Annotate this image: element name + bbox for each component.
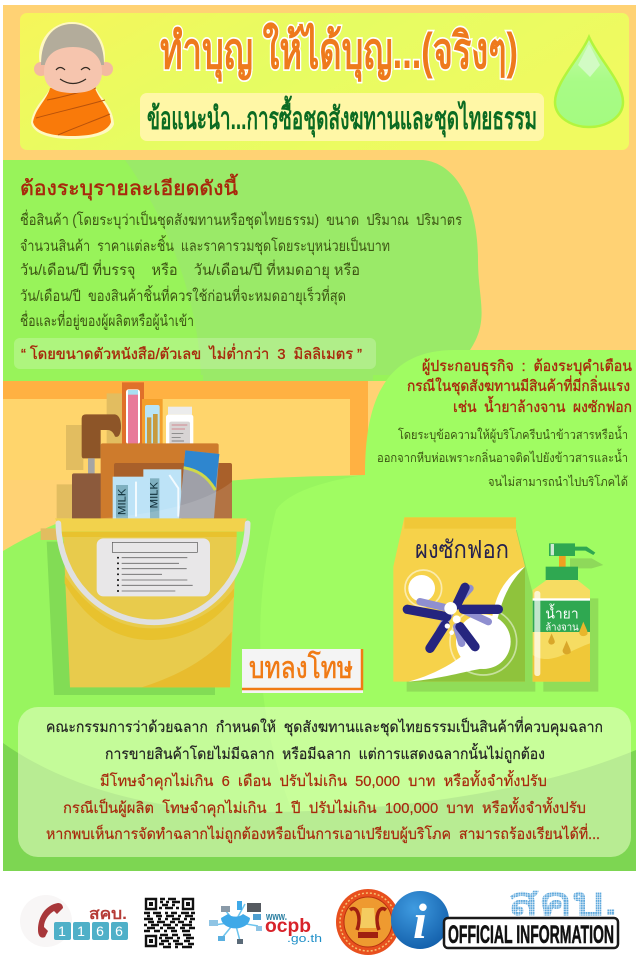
label: penalties: บทลงโทษ [249,650,353,685]
body text: วัน/เดือน/ปี ที่บรรจุ หรือ วัน/เดือน/ปี ที่หมดอายุ หรือ [20,259,360,280]
logo: hotline 1166: 6 [115,923,123,939]
icon: monk [31,22,114,139]
logo: official information: สคบ. [508,880,618,924]
icon: water drop [555,37,623,127]
icon: dish soap bottle [533,543,603,692]
warning text [377,425,628,489]
subtitle [140,93,544,141]
label: penalties [242,649,363,693]
logo: hotline 1166: 6 [96,923,104,939]
note pill: “ โดยขนาดตัวหนังสือ/ตัวเลข ไม่ต่ำกว่า 3 มิลลิเมตร ” [21,343,362,363]
warning text: จนไม่สามารถนำไปบริโภคได้ [488,474,628,489]
logo: ocpb website: ocpb [265,916,311,937]
body text: ชื่อและที่อยู่ของผู้ผลิตหรือผู้นำเข้า [20,310,194,330]
panel: required details [3,160,482,381]
body text: ชื่อสินค้า (โดยระบุว่าเป็นชุดสังฆทานหรือชุดไทยธรรม) ขนาด ปริมาณ ปริมาตร [20,209,462,230]
body text [20,209,462,330]
illustration: detergent powder: ผงซักฟอก [415,537,509,564]
logo: hotline 1166: 1 [77,923,85,939]
icon: QR code [144,897,195,948]
penalty text [46,770,600,843]
panel: penalty details [18,707,631,857]
logo: ocpb website: .go.th [287,933,322,945]
panel: business warning [377,358,632,489]
logo: hotline 1166 [20,895,128,947]
logo: consumer protection board seal [336,889,400,955]
warning heading: ผู้ประกอบธุรกิจ : ต้องระบุคำเตือน [422,358,632,376]
logo: hotline 1166: 1 [58,923,66,939]
lower background [3,350,636,871]
logo: official information [444,880,618,949]
body text: วัน/เดือน/ปี ของสินค้าชิ้นที่ควรใช้ก่อนที่จะหมดอายุเร็วที่สุด [20,285,346,306]
illustration: donation bucket [41,382,248,695]
penalty text: กรณีเป็นผู้ผลิต โทษจำคุกไม่เกิน 1 ปี ปรับไม่เกิน 100,000 บาท หรือทั้งจำทั้งปรับ [63,797,586,818]
icon: dish soap bottle: น้ำยา [545,603,579,621]
body text: จำนวนสินค้า ราคาแต่ละชิ้น และราคารวมชุดโดยระบุหน่วยเป็นบาท [20,235,390,256]
regulation text [46,716,603,763]
heading: ต้องระบุรายละเอียดดังนี้ [20,174,238,201]
warning heading [407,358,632,416]
illustration: donation bucket: MILK [148,481,160,508]
regulation text: คณะกรรมการว่าด้วยฉลาก กำหนดให้ ชุดสังฆทานและชุดไทยธรรมเป็นสินค้าที่ควบคุมฉลาก [46,716,603,737]
icon: info circle [391,891,449,949]
illustration: detergent powder [393,517,603,692]
icon: dish soap bottle: ล้างจาน [545,622,579,634]
regulation text: การขายสินค้าโดยไม่มีฉลาก หรือมีฉลาก แต่การแสดงฉลากนั้นไม่ถูกต้อง [105,743,545,763]
note pill [14,338,376,369]
logo: ocpb website: www. [265,911,287,923]
penalty text: มีโทษจำคุกไม่เกิน 6 เดือน ปรับไม่เกิน 50,000 บาท หรือทั้งจำทั้งปรับ [100,770,547,791]
logo: ocpb website [209,901,322,945]
icon: info circle: i [413,893,427,949]
illustration: donation bucket: MILK [117,488,129,515]
penalty text: หากพบเห็นการจัดทำฉลากไม่ถูกต้องหรือเป็นการเอาเปรียบผู้บริโภค สามารถร้องเรียนได้ที่... [46,823,600,843]
footer [0,871,641,960]
logo: hotline 1166: สคบ. [89,906,127,923]
panel: header [20,13,629,150]
